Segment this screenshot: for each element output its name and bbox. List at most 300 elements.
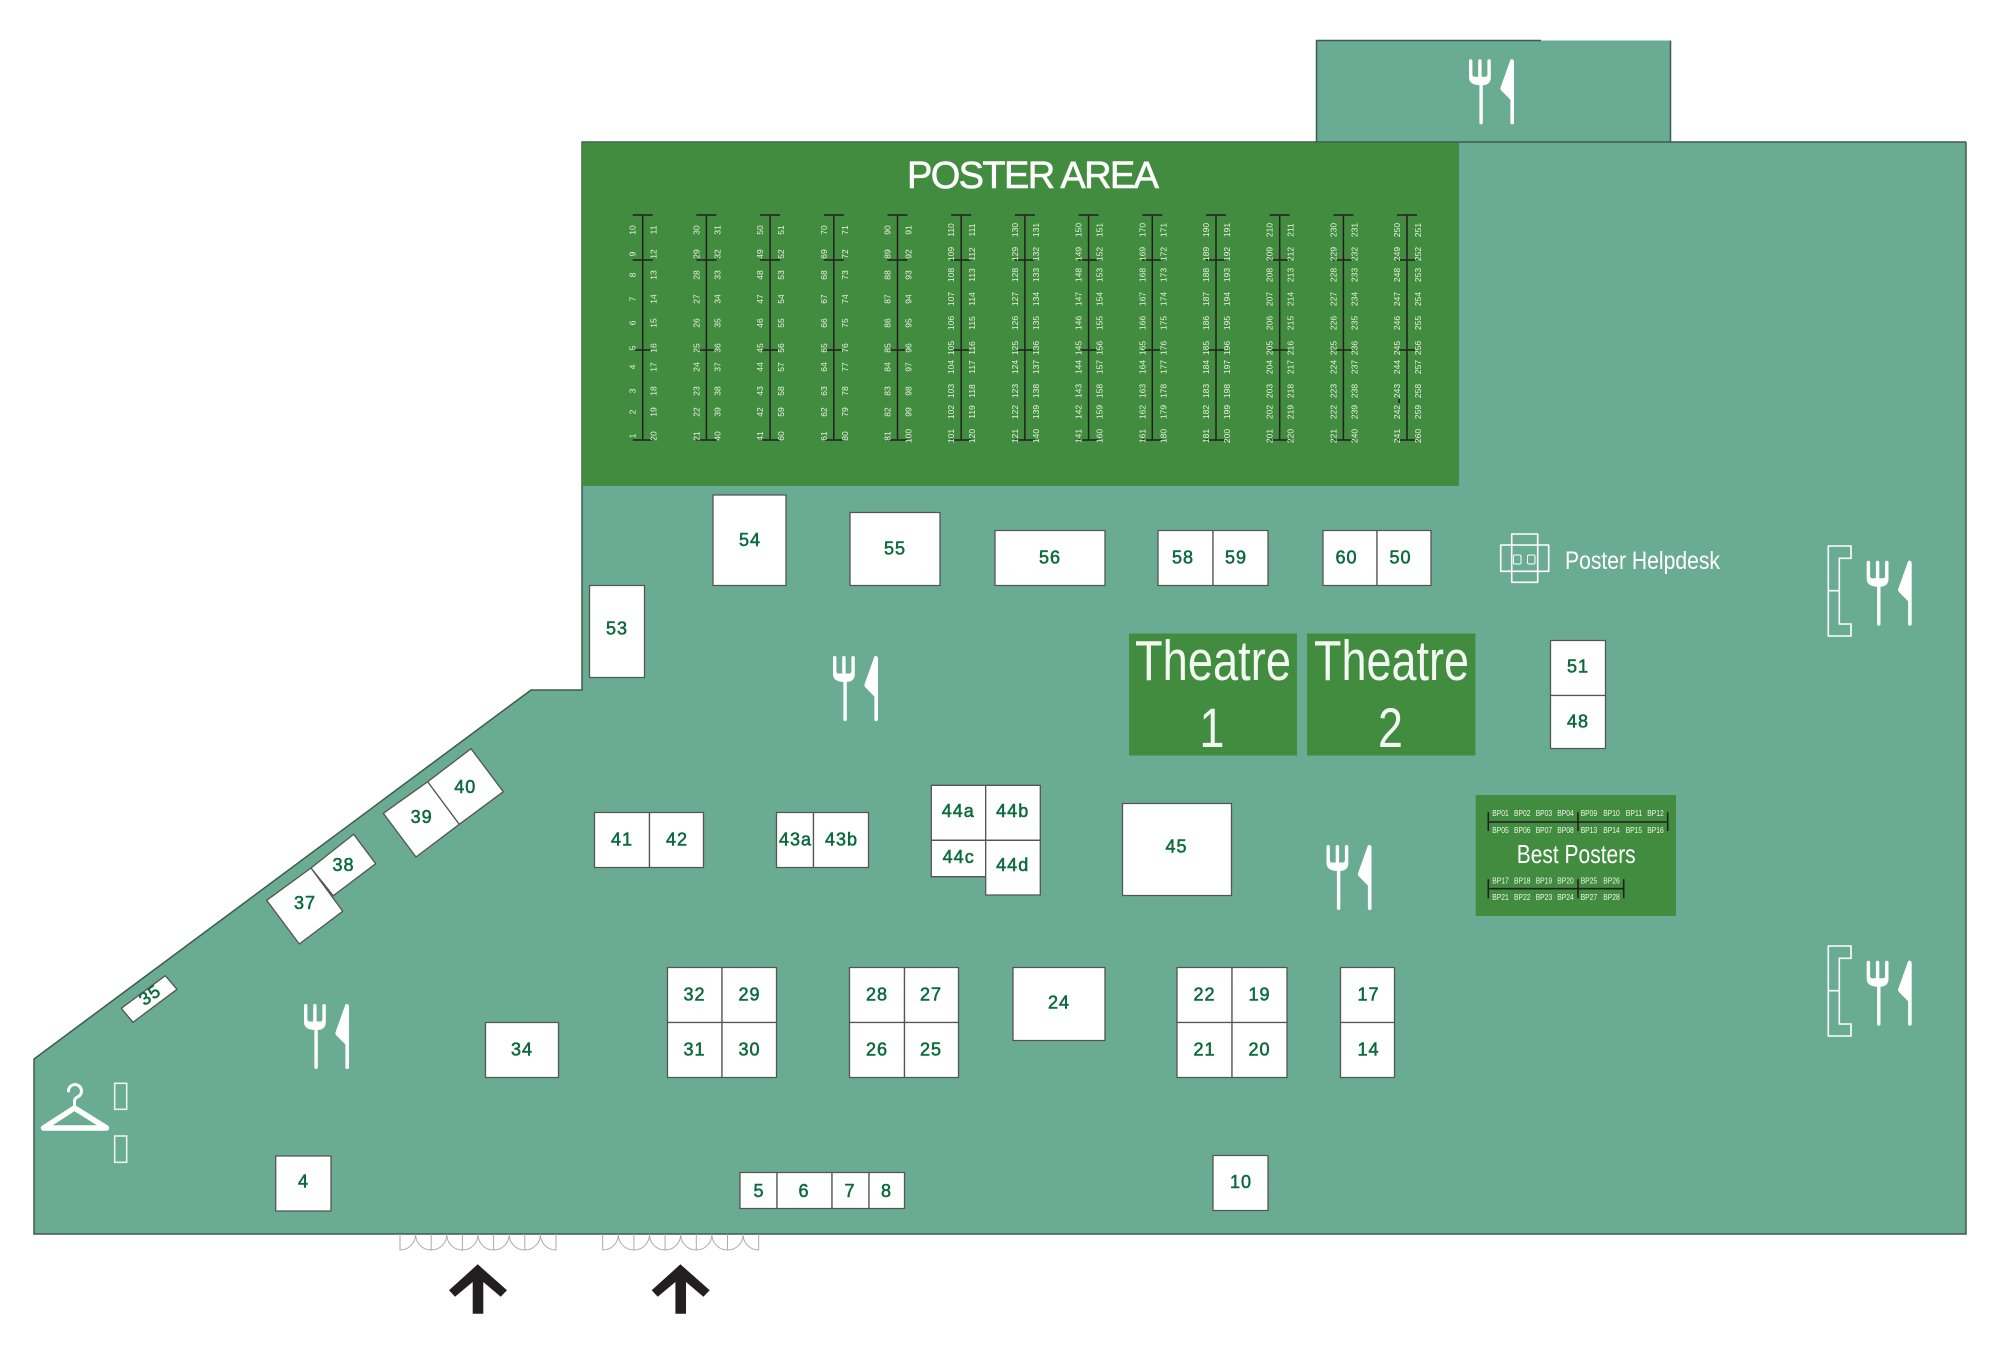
poster board rows 1 to 260: 87 xyxy=(882,294,892,304)
panel: best posters: BP07 xyxy=(1536,826,1553,835)
poster board rows 1 to 260: 200 xyxy=(1222,429,1232,443)
poster board rows 1 to 260: 126 xyxy=(1010,316,1020,330)
poster board rows 1 to 260: 158 xyxy=(1095,384,1105,398)
booths 32 29 31 30: 32 xyxy=(683,984,706,1004)
booths 5 6 7 8: 8 xyxy=(881,1181,892,1201)
poster board rows 1 to 260: 45 xyxy=(755,343,765,353)
booths 37 and 38: 37 xyxy=(294,893,316,913)
poster board rows 1 to 260: 113 xyxy=(967,268,977,282)
poster board rows 1 to 260: 97 xyxy=(904,362,914,372)
poster board rows 1 to 260: 223 xyxy=(1328,384,1338,398)
poster board rows 1 to 260: 4 xyxy=(628,364,638,369)
booths 28 27 26 25: 27 xyxy=(920,984,942,1004)
poster board rows 1 to 260: 245 xyxy=(1392,341,1402,355)
panel: best posters: BP05 xyxy=(1492,826,1509,835)
poster board rows 1 to 260: 132 xyxy=(1031,247,1041,261)
booths 5 6 7 8: 7 xyxy=(844,1181,856,1201)
booths 5 6 7 8: 5 xyxy=(753,1181,765,1201)
poster board rows 1 to 260: 243 xyxy=(1392,384,1402,398)
poster board rows 1 to 260: 31 xyxy=(712,225,722,235)
poster board rows 1 to 260: 77 xyxy=(840,362,850,372)
booths: exhibitor stands xyxy=(121,495,1605,1211)
poster board rows 1 to 260: 173 xyxy=(1158,268,1168,282)
poster board rows 1 to 260: 222 xyxy=(1328,405,1338,419)
poster board rows 1 to 260: 153 xyxy=(1095,268,1105,282)
poster board rows 1 to 260: 249 xyxy=(1392,247,1402,261)
poster board rows 1 to 260: 151 xyxy=(1095,223,1105,237)
booths 32 29 31 30 xyxy=(668,968,776,1078)
poster board rows 1 to 260: 128 xyxy=(1010,268,1020,282)
booths 44a to 44d: 44a xyxy=(942,801,975,821)
poster board rows 1 to 260: 203 xyxy=(1265,384,1275,398)
booths 39 and 40: 39 xyxy=(411,807,433,827)
panel: best posters: BP10 xyxy=(1603,809,1620,818)
poster board rows 1 to 260: 221 xyxy=(1328,429,1338,443)
poster board rows 1 to 260: 95 xyxy=(904,318,914,328)
icon: cutlery, lower left xyxy=(304,1004,349,1069)
booths 60 and 50: 60 xyxy=(1335,548,1358,568)
booths 41 and 42: 42 xyxy=(666,830,688,850)
poster board rows 1 to 260: 27 xyxy=(691,294,701,304)
poster helpdesk xyxy=(1501,534,1720,582)
poster board rows 1 to 260: 253 xyxy=(1413,268,1423,282)
poster board rows 1 to 260: 71 xyxy=(840,225,850,235)
icon: cutlery, upper right xyxy=(1867,561,1912,626)
panel: theatre 2: Theatre xyxy=(1314,629,1469,693)
poster board rows 1 to 260: 182 xyxy=(1201,405,1211,419)
poster board rows 1 to 260: 70 xyxy=(819,225,829,235)
poster board rows 1 to 260: 15 xyxy=(649,318,659,328)
booth 34: 34 xyxy=(511,1040,533,1060)
booths 22 19 21 20: 19 xyxy=(1248,984,1271,1004)
poster board rows 1 to 260: 30 xyxy=(691,225,701,235)
poster board rows 1 to 260: 155 xyxy=(1095,316,1105,330)
panel: best posters: BP13 xyxy=(1581,826,1598,835)
poster board rows 1 to 260: 46 xyxy=(755,318,765,328)
booth 56 xyxy=(995,530,1105,586)
poster board rows 1 to 260: 90 xyxy=(882,225,892,235)
poster board rows 1 to 260: 208 xyxy=(1265,268,1275,282)
poster board rows 1 to 260: 25 xyxy=(691,343,701,353)
panel: best posters: BP28 xyxy=(1603,893,1620,902)
poster board rows 1 to 260: 201 xyxy=(1265,429,1275,443)
poster board rows 1 to 260: 250 xyxy=(1392,223,1402,237)
panel: best posters: BP19 xyxy=(1536,876,1553,886)
poster board rows 1 to 260: 177 xyxy=(1158,360,1168,374)
booth 53: 53 xyxy=(606,618,628,638)
panel: best posters: BP15 xyxy=(1626,826,1643,835)
entrance doors, right xyxy=(603,1234,759,1250)
booths 37 and 38: 38 xyxy=(332,855,355,875)
panel: theatre 1: 1 xyxy=(1200,696,1224,759)
poster board rows 1 to 260: 174 xyxy=(1158,292,1168,306)
panel: best posters: BP12 xyxy=(1647,809,1664,818)
panel: best posters: BP21 xyxy=(1492,893,1509,902)
poster board rows 1 to 260: 213 xyxy=(1286,268,1296,282)
poster board rows 1 to 260: 244 xyxy=(1392,360,1402,374)
booths 41 and 42 xyxy=(594,812,704,868)
poster board rows 1 to 260: 119 xyxy=(967,405,977,419)
poster board rows 1 to 260: 134 xyxy=(1031,292,1041,306)
poster board rows 1 to 260: 36 xyxy=(712,343,722,353)
icon: helpdesk xyxy=(1501,534,1549,582)
booths 44a to 44d: 44b xyxy=(996,801,1029,821)
poster board rows 1 to 260: 108 xyxy=(946,268,956,282)
panel: theatre 2 xyxy=(1307,629,1476,759)
poster board rows 1 to 260: 150 xyxy=(1074,223,1084,237)
poster board rows 1 to 260: 152 xyxy=(1095,247,1105,261)
poster board rows 1 to 260: 96 xyxy=(904,343,914,353)
poster board rows 1 to 260: 164 xyxy=(1137,360,1147,374)
poster board rows 1 to 260: 252 xyxy=(1413,247,1423,261)
booths 32 29 31 30: 31 xyxy=(683,1040,706,1060)
poster board rows 1 to 260: 255 xyxy=(1413,316,1423,330)
poster board rows 1 to 260: 123 xyxy=(1010,384,1020,398)
poster board rows 1 to 260: 235 xyxy=(1349,316,1359,330)
poster board rows 1 to 260: 56 xyxy=(776,343,786,353)
poster board rows 1 to 260: 91 xyxy=(904,225,914,235)
poster board rows 1 to 260: 156 xyxy=(1095,341,1105,355)
poster board rows 1 to 260: 61 xyxy=(819,431,829,441)
poster board rows 1 to 260: 240 xyxy=(1349,429,1359,443)
booth 10 xyxy=(1213,1156,1268,1210)
poster board rows 1 to 260: 194 xyxy=(1222,292,1232,306)
poster board rows 1 to 260: 10 xyxy=(628,225,638,235)
poster board rows 1 to 260: 26 xyxy=(691,318,701,328)
poster board rows 1 to 260: 135 xyxy=(1031,316,1041,330)
poster board rows 1 to 260: 50 xyxy=(755,225,765,235)
poster board rows 1 to 260: 206 xyxy=(1265,316,1275,330)
panel: best posters: BP08 xyxy=(1557,826,1574,835)
counter: upper right xyxy=(1828,546,1851,636)
poster board rows 1 to 260: 183 xyxy=(1201,384,1211,398)
panel: best posters xyxy=(1476,795,1676,916)
poster board rows 1 to 260: 238 xyxy=(1349,384,1359,398)
booth 10: 10 xyxy=(1230,1172,1252,1192)
poster board rows 1 to 260: 251 xyxy=(1413,223,1423,237)
poster board rows 1 to 260: 122 xyxy=(1010,405,1020,419)
panel: poster area xyxy=(582,142,1459,486)
booths 17 and 14: 14 xyxy=(1357,1040,1380,1060)
poster board rows 1 to 260: 81 xyxy=(882,431,892,441)
poster board rows 1 to 260: 67 xyxy=(819,294,829,304)
booth 4: 4 xyxy=(298,1172,309,1192)
poster board rows 1 to 260: 39 xyxy=(712,407,722,417)
poster board rows 1 to 260: 190 xyxy=(1201,223,1211,237)
panel: best posters: BP22 xyxy=(1514,893,1531,902)
panel: best posters: BP18 xyxy=(1514,876,1531,886)
poster board rows 1 to 260: 66 xyxy=(819,318,829,328)
poster board rows 1 to 260: 181 xyxy=(1201,429,1211,443)
poster board rows 1 to 260: 225 xyxy=(1328,341,1338,355)
poster board rows 1 to 260: 166 xyxy=(1137,316,1147,330)
poster board rows 1 to 260: 62 xyxy=(819,407,829,417)
poster board rows 1 to 260: 43 xyxy=(755,386,765,396)
booth 55 xyxy=(850,512,940,586)
poster board rows 1 to 260: 28 xyxy=(691,270,701,280)
poster board rows 1 to 260: 237 xyxy=(1349,360,1359,374)
poster board rows 1 to 260: 127 xyxy=(1010,292,1020,306)
poster board rows 1 to 260: 76 xyxy=(840,343,850,353)
poster board rows 1 to 260: 256 xyxy=(1413,341,1423,355)
poster board rows 1 to 260: 47 xyxy=(755,294,765,304)
panel: best posters: BP23 xyxy=(1536,893,1553,902)
booths 22 19 21 20 xyxy=(1177,968,1287,1078)
poster board rows 1 to 260: 215 xyxy=(1286,316,1296,330)
arrow: entrance right xyxy=(652,1264,710,1314)
poster board rows 1 to 260: 157 xyxy=(1095,360,1105,374)
poster board rows 1 to 260: 232 xyxy=(1349,247,1359,261)
poster board rows 1 to 260: 5 xyxy=(628,345,638,350)
poster board rows 1 to 260: 130 xyxy=(1010,223,1020,237)
booths 58 and 59 xyxy=(1158,530,1268,586)
booths 58 and 59: 58 xyxy=(1172,548,1194,568)
poster board rows 1 to 260: 92 xyxy=(904,249,914,259)
poster board rows 1 to 260: 32 xyxy=(712,249,722,259)
poster board rows 1 to 260: 246 xyxy=(1392,316,1402,330)
booth 53 xyxy=(590,586,644,678)
poster board rows 1 to 260: 102 xyxy=(946,405,956,419)
poster board rows 1 to 260: 116 xyxy=(967,341,977,355)
poster board rows 1 to 260: 63 xyxy=(819,386,829,396)
poster board rows 1 to 260: 88 xyxy=(882,270,892,280)
booth 35 xyxy=(121,976,177,1022)
poster board rows 1 to 260: 163 xyxy=(1137,384,1147,398)
poster board rows 1 to 260: 14 xyxy=(649,294,659,304)
poster board rows 1 to 260: 202 xyxy=(1265,405,1275,419)
poster board rows 1 to 260: 161 xyxy=(1137,429,1147,443)
panel: theatre 1 xyxy=(1129,629,1297,759)
panel: theatre 1: Theatre xyxy=(1135,629,1291,693)
poster board rows 1 to 260: 160 xyxy=(1095,429,1105,443)
poster board rows 1 to 260: 165 xyxy=(1137,341,1147,355)
panel: best posters: BP04 xyxy=(1557,809,1574,818)
panel: best posters: BP01 xyxy=(1492,809,1509,818)
poster board rows 1 to 260: 41 xyxy=(755,431,765,441)
poster board rows 1 to 260: 1 xyxy=(628,433,638,438)
poster board rows 1 to 260: 65 xyxy=(819,343,829,353)
poster board rows 1 to 260: 22 xyxy=(691,407,701,417)
poster board rows 1 to 260: 211 xyxy=(1286,223,1296,237)
poster board rows 1 to 260: 131 xyxy=(1031,223,1041,237)
booth 4 xyxy=(276,1156,331,1211)
poster board rows 1 to 260: 212 xyxy=(1286,247,1296,261)
booth 54 xyxy=(713,495,786,586)
cloakroom racks xyxy=(115,1083,127,1162)
poster board rows 1 to 260: 9 xyxy=(628,251,638,256)
poster board rows 1 to 260: 224 xyxy=(1328,360,1338,374)
poster board rows 1 to 260: 220 xyxy=(1286,429,1296,443)
poster board rows 1 to 260: 121 xyxy=(1010,429,1020,443)
poster board rows 1 to 260: 13 xyxy=(649,270,659,280)
panel: best posters: Best Posters xyxy=(1517,839,1636,869)
poster board rows 1 to 260: 29 xyxy=(691,249,701,259)
booth 56: 56 xyxy=(1039,548,1061,568)
poster board rows 1 to 260: 93 xyxy=(904,270,914,280)
poster board rows 1 to 260: 207 xyxy=(1265,292,1275,306)
poster board rows 1 to 260: 98 xyxy=(904,386,914,396)
poster board rows 1 to 260: 227 xyxy=(1328,292,1338,306)
poster board rows 1 to 260: 3 xyxy=(628,388,638,393)
poster board rows 1 to 260: 186 xyxy=(1201,316,1211,330)
poster board rows 1 to 260: 129 xyxy=(1010,247,1020,261)
poster board rows 1 to 260: 53 xyxy=(776,270,786,280)
booth 55: 55 xyxy=(884,538,906,558)
poster board rows 1 to 260: 140 xyxy=(1031,429,1041,443)
booths 51 and 48 xyxy=(1550,640,1606,748)
poster board rows 1 to 260: 111 xyxy=(967,223,977,236)
poster board rows 1 to 260: 112 xyxy=(967,247,977,261)
booth 54: 54 xyxy=(739,530,761,550)
poster board rows 1 to 260: 230 xyxy=(1328,223,1338,237)
booths 28 27 26 25 xyxy=(850,968,958,1078)
poster board rows 1 to 260: 16 xyxy=(649,343,659,353)
poster board rows 1 to 260: 68 xyxy=(819,270,829,280)
poster board rows 1 to 260: 107 xyxy=(946,292,956,306)
poster board rows 1 to 260: 143 xyxy=(1074,384,1084,398)
poster board rows 1 to 260: 104 xyxy=(946,360,956,374)
booth 45: 45 xyxy=(1165,836,1188,856)
booths 44a to 44d: 44d xyxy=(996,855,1029,875)
poster board rows 1 to 260: 159 xyxy=(1095,405,1105,419)
poster board rows 1 to 260: 74 xyxy=(840,294,850,304)
poster board rows 1 to 260: 169 xyxy=(1137,247,1147,261)
poster board rows 1 to 260: 239 xyxy=(1349,405,1359,419)
panel: best posters: BP20 xyxy=(1557,876,1574,886)
poster board rows 1 to 260: 168 xyxy=(1137,268,1147,282)
poster board rows 1 to 260: 219 xyxy=(1286,405,1296,419)
poster board rows 1 to 260: 145 xyxy=(1074,341,1084,355)
booths 43a and 43b xyxy=(776,812,868,868)
booths 44a to 44d: 44c xyxy=(943,847,975,867)
poster board rows 1 to 260: 199 xyxy=(1222,405,1232,419)
poster board rows 1 to 260: 149 xyxy=(1074,247,1084,261)
poster board rows 1 to 260: 69 xyxy=(819,249,829,259)
poster board rows 1 to 260: 257 xyxy=(1413,360,1423,374)
poster board rows 1 to 260: 52 xyxy=(776,249,786,259)
poster board rows 1 to 260: 24 xyxy=(691,362,701,372)
poster board rows 1 to 260: 210 xyxy=(1265,223,1275,237)
poster board rows 1 to 260: 176 xyxy=(1158,341,1168,355)
poster board rows 1 to 260: 144 xyxy=(1074,360,1084,374)
booth 35: 35 xyxy=(135,980,165,1010)
poster board rows 1 to 260: 109 xyxy=(946,247,956,261)
poster board rows 1 to 260: 185 xyxy=(1201,341,1211,355)
poster board rows 1 to 260: 44 xyxy=(755,362,765,372)
poster board rows 1 to 260: 114 xyxy=(967,292,977,306)
poster board rows 1 to 260: 37 xyxy=(712,362,722,372)
poster board rows 1 to 260: 40 xyxy=(712,431,722,441)
poster board rows 1 to 260: 11 xyxy=(649,225,659,234)
panel: best posters: BP14 xyxy=(1603,826,1620,835)
poster board rows 1 to 260: 73 xyxy=(840,270,850,280)
poster board rows 1 to 260: 178 xyxy=(1158,384,1168,398)
booths 22 19 21 20: 22 xyxy=(1193,984,1216,1004)
booths 17 and 14: 17 xyxy=(1357,984,1380,1004)
icon: cutlery, annex xyxy=(1469,59,1514,124)
poster board rows 1 to 260: 146 xyxy=(1074,316,1084,330)
booths 5 6 7 8: 6 xyxy=(798,1181,810,1201)
poster board rows 1 to 260: 38 xyxy=(712,386,722,396)
poster board rows 1 to 260: 120 xyxy=(967,429,977,443)
poster board rows 1 to 260: 191 xyxy=(1222,223,1232,237)
panel: best posters: BP06 xyxy=(1514,826,1531,835)
booths 17 and 14 xyxy=(1340,968,1394,1078)
panel: best posters: BP26 xyxy=(1603,876,1620,886)
panel: best posters: BP16 xyxy=(1647,826,1664,835)
poster board rows 1 to 260: 35 xyxy=(712,318,722,328)
poster board rows 1 to 260: 6 xyxy=(628,320,638,325)
poster board rows 1 to 260: 216 xyxy=(1286,341,1296,355)
panel: best posters: BP24 xyxy=(1557,893,1574,902)
booths 44a to 44d xyxy=(931,785,1040,895)
poster board rows 1 to 260: 184 xyxy=(1201,360,1211,374)
poster board rows 1 to 260: 247 xyxy=(1392,292,1402,306)
poster board rows 1 to 260: 8 xyxy=(628,272,638,277)
poster board rows 1 to 260: 260 xyxy=(1413,429,1423,443)
poster board rows 1 to 260: 242 xyxy=(1392,405,1402,419)
booths 39 and 40: 40 xyxy=(454,777,476,797)
poster board rows 1 to 260: 20 xyxy=(649,431,659,441)
poster board rows 1 to 260: 99 xyxy=(904,407,914,417)
booths 58 and 59: 59 xyxy=(1225,548,1247,568)
poster board rows 1 to 260: 234 xyxy=(1349,292,1359,306)
poster board rows 1 to 260: 85 xyxy=(882,343,892,353)
booths 32 29 31 30: 29 xyxy=(738,984,761,1004)
poster board rows 1 to 260: 12 xyxy=(649,249,659,259)
poster board rows 1 to 260: 23 xyxy=(691,386,701,396)
poster board rows 1 to 260 xyxy=(628,215,1423,443)
counter: lower right xyxy=(1828,946,1851,1036)
entrance doors, left xyxy=(400,1234,556,1250)
poster board rows 1 to 260: 180 xyxy=(1158,429,1168,443)
poster board rows 1 to 260: 7 xyxy=(628,296,638,301)
poster board rows 1 to 260: 142 xyxy=(1074,405,1084,419)
poster board rows 1 to 260: 214 xyxy=(1286,292,1296,306)
poster board rows 1 to 260: 209 xyxy=(1265,247,1275,261)
booths 22 19 21 20: 21 xyxy=(1193,1040,1216,1060)
panel: best posters: BP03 xyxy=(1536,809,1553,818)
poster board rows 1 to 260: 115 xyxy=(967,316,977,330)
poster board rows 1 to 260: 58 xyxy=(776,386,786,396)
poster board rows 1 to 260: 34 xyxy=(712,294,722,304)
booths 43a and 43b: 43b xyxy=(825,830,858,850)
poster board rows 1 to 260: 226 xyxy=(1328,316,1338,330)
poster board rows 1 to 260: 110 xyxy=(946,223,956,237)
poster board rows 1 to 260: 94 xyxy=(904,294,914,304)
booth 34 xyxy=(486,1022,558,1078)
poster board rows 1 to 260: 139 xyxy=(1031,405,1041,419)
poster board rows 1 to 260: 229 xyxy=(1328,247,1338,261)
poster board rows 1 to 260: 138 xyxy=(1031,384,1041,398)
panel: best posters: BP02 xyxy=(1514,809,1531,818)
poster board rows 1 to 260: 106 xyxy=(946,316,956,330)
poster board rows 1 to 260: 198 xyxy=(1222,384,1232,398)
panel: best posters: BP09 xyxy=(1581,809,1598,818)
poster board rows 1 to 260: 54 xyxy=(776,294,786,304)
label: poster helpdesk: Poster Helpdesk xyxy=(1565,547,1720,575)
poster board rows 1 to 260: 89 xyxy=(882,249,892,259)
poster board rows 1 to 260: 175 xyxy=(1158,316,1168,330)
poster board rows 1 to 260: 55 xyxy=(776,318,786,328)
booth 24: 24 xyxy=(1048,992,1070,1012)
poster board rows 1 to 260: 17 xyxy=(649,362,659,372)
poster board rows 1 to 260: 162 xyxy=(1137,405,1147,419)
poster board rows 1 to 260: 241 xyxy=(1392,429,1402,443)
booths 43a and 43b: 43a xyxy=(779,830,812,850)
poster board rows 1 to 260: 83 xyxy=(882,386,892,396)
booths 41 and 42: 41 xyxy=(611,830,633,850)
